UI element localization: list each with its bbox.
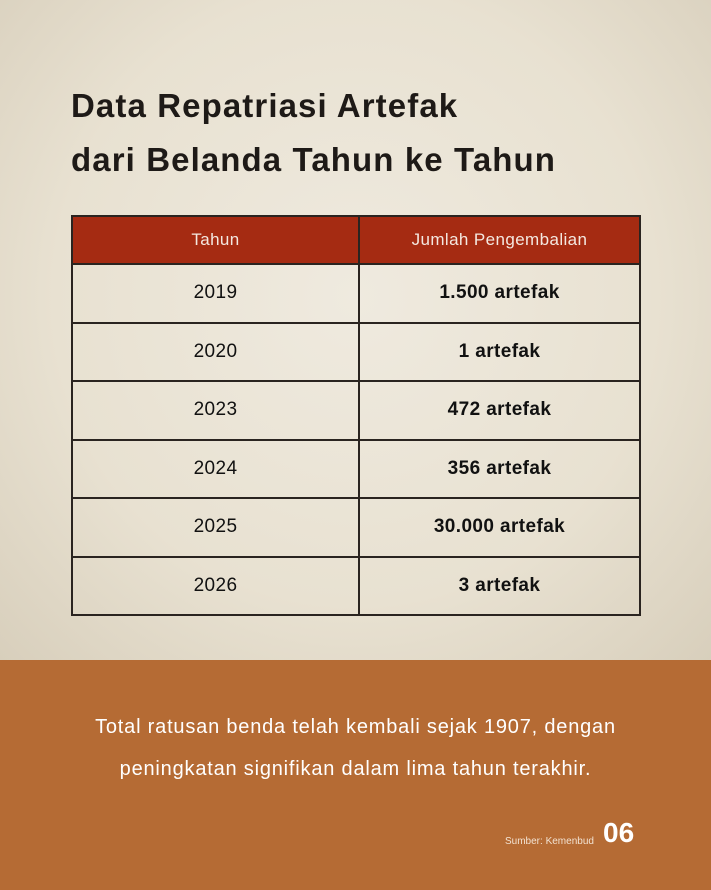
table: repatriation data: Tahun — [191, 230, 240, 249]
footer band — [0, 660, 711, 890]
table: repatriation data — [71, 215, 641, 616]
table: repatriation data: 472 artefak — [448, 399, 551, 420]
table: repatriation data: 2019 — [194, 282, 237, 303]
summary text — [95, 716, 616, 780]
table: repatriation data: 2026 — [194, 575, 237, 596]
table: repatriation data: 2020 — [194, 341, 237, 362]
table: repatriation data: 1.500 artefak — [439, 282, 560, 303]
source: Sumber: Kemenbud — [505, 836, 594, 847]
summary text: Total ratusan benda telah kembali sejak 1907, dengan — [95, 716, 616, 738]
table: repatriation data: 2025 — [194, 516, 237, 537]
summary text: peningkatan signifikan dalam lima tahun terakhir. — [120, 758, 591, 780]
title: dari Belanda Tahun ke Tahun — [71, 141, 556, 178]
table: repatriation data: 2023 — [194, 399, 237, 420]
title: Data Repatriasi Artefak — [71, 87, 458, 124]
page number: 06 — [603, 817, 634, 848]
table: repatriation data: 2024 — [194, 458, 237, 479]
table: repatriation data: 356 artefak — [448, 458, 551, 479]
table: repatriation data: 3 artefak — [459, 575, 540, 596]
table: repatriation data: 1 artefak — [459, 341, 540, 362]
table: repatriation data: 30.000 artefak — [434, 516, 565, 537]
table: repatriation data: Jumlah Pengembalian — [412, 230, 587, 249]
title — [71, 87, 556, 178]
